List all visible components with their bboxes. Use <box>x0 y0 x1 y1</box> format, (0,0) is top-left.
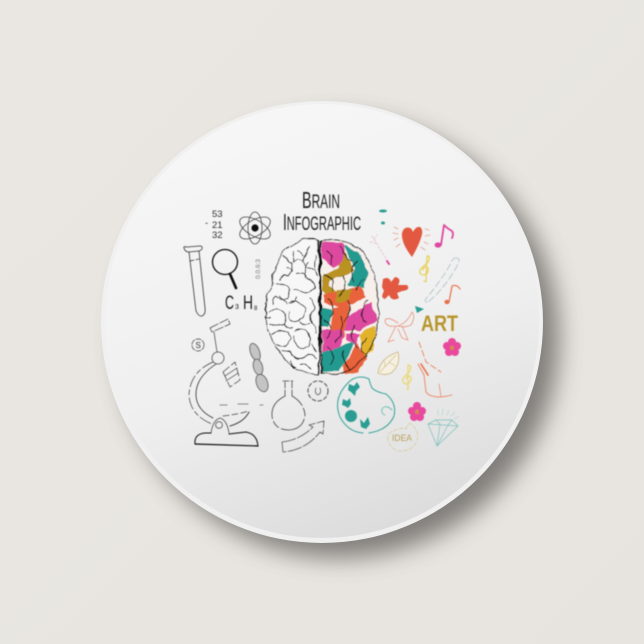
icon: orange music note <box>444 285 460 304</box>
icon: leaf <box>378 352 399 374</box>
icon: pink music note <box>435 225 453 248</box>
icon: coin: S <box>196 341 201 350</box>
icon: test tube <box>184 246 205 316</box>
math numbers: - <box>205 218 208 229</box>
palette paint spots <box>342 382 370 429</box>
lobe grooves <box>321 240 379 374</box>
icon: diamond <box>428 409 459 446</box>
icon: paint brush <box>415 258 459 313</box>
vertical dotted formula: 0.0.6:3 <box>255 259 262 279</box>
icon: round flask <box>272 381 305 430</box>
icon: light yellow treble clef <box>403 365 411 390</box>
chemical formula: 8 <box>254 306 258 312</box>
icon: gear <box>308 381 328 401</box>
chemical formula: 3 <box>235 304 239 311</box>
chemical formula: C <box>225 293 234 314</box>
icon: magnifying glass <box>212 250 238 288</box>
artwork <box>184 187 461 452</box>
icon: coin <box>192 339 204 351</box>
icon: ribbon bow <box>385 312 414 342</box>
chemical formula <box>225 293 258 314</box>
math numbers: 21 <box>212 220 223 231</box>
lobe colors <box>321 243 376 373</box>
math numbers <box>205 209 223 241</box>
math numbers: 53 <box>212 209 223 220</box>
title: BRAIN <box>302 187 340 213</box>
icon: yellow treble clef <box>420 256 429 282</box>
brain right hemisphere colored <box>321 240 379 374</box>
icon: idea cloud <box>388 424 418 451</box>
icon: magenta flower top <box>443 338 461 356</box>
icon: paint palette <box>338 377 395 433</box>
art label: ART <box>421 311 458 336</box>
chemical formula: H <box>243 293 253 314</box>
button shadow <box>119 118 559 558</box>
icon: microscope <box>189 319 263 446</box>
icon: magenta flower bottom <box>408 402 426 421</box>
icon: curved arrow <box>282 421 324 452</box>
icon: heart <box>393 227 430 257</box>
icon: orange paint splat <box>382 277 408 299</box>
icon: dna helix <box>248 342 270 393</box>
math numbers: 32 <box>212 230 223 241</box>
title <box>283 187 361 235</box>
brain left hemisphere <box>265 239 320 374</box>
icon: orange violin sketch <box>418 342 452 397</box>
icon: atom <box>236 212 274 244</box>
title: INFOGRAPHIC <box>283 209 361 235</box>
icon: idea cloud: IDEA <box>392 433 412 443</box>
round button <box>101 101 543 543</box>
icon: pink wand <box>370 235 389 264</box>
icon: teal paint dashes <box>379 210 387 224</box>
